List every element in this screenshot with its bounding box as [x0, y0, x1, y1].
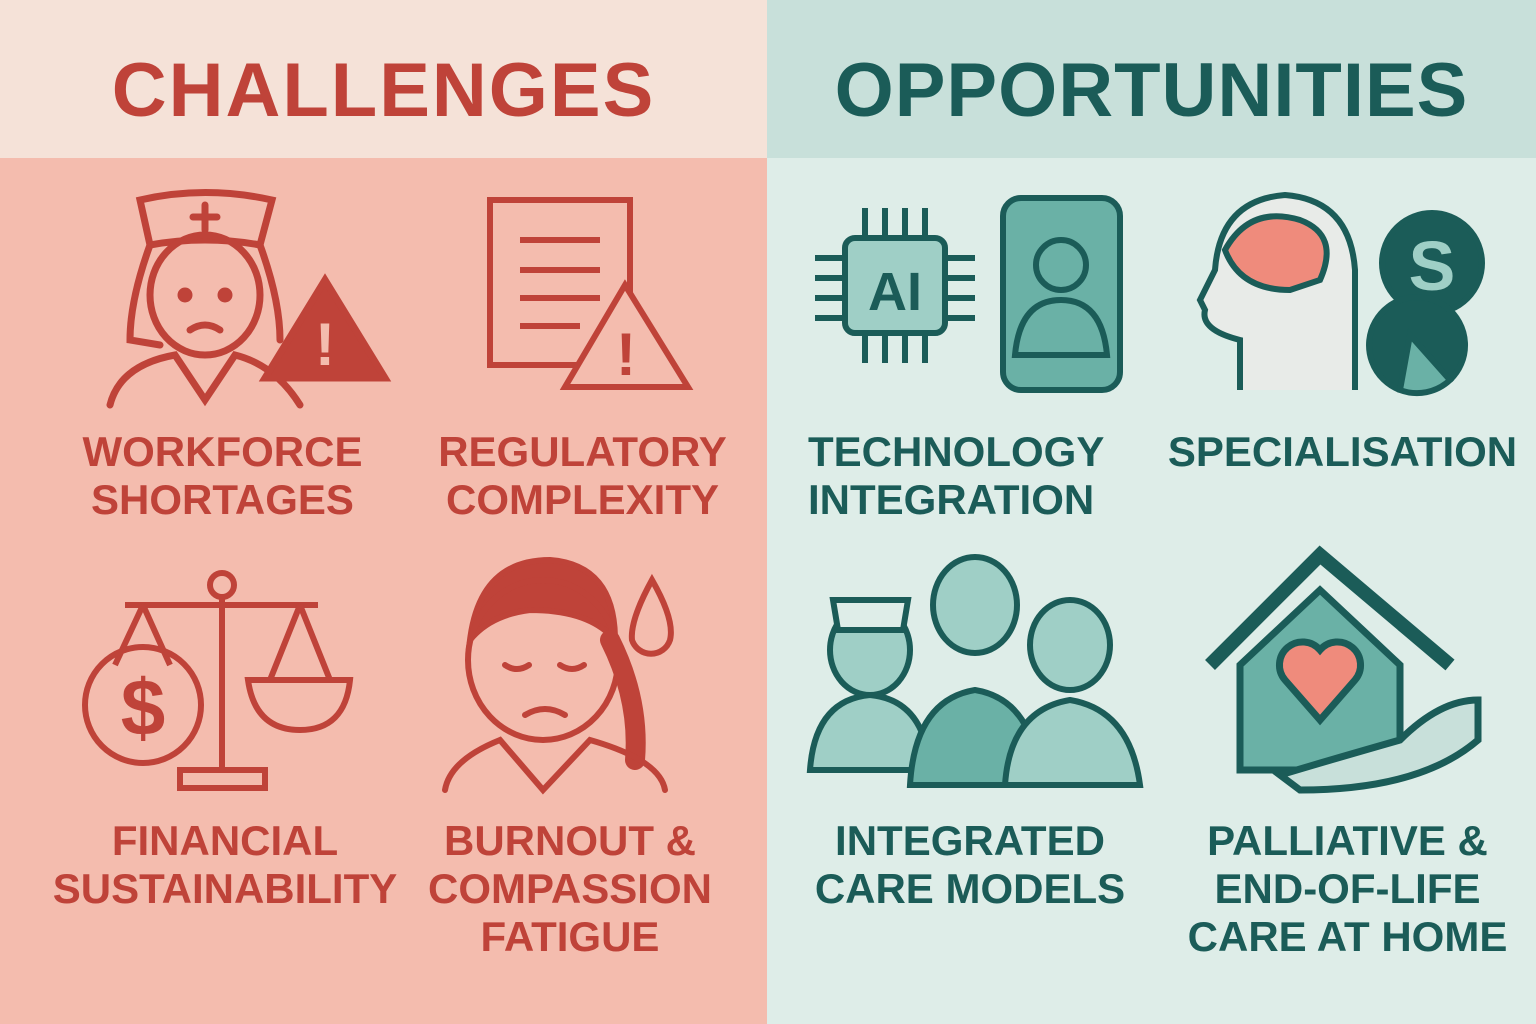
label: palliative care: CARE AT HOME — [1188, 913, 1507, 960]
icon: house with heart and hand — [1210, 555, 1478, 790]
icon: burnout person — [445, 560, 671, 790]
label: burnout: FATIGUE — [481, 913, 659, 960]
label: palliative care: END-OF-LIFE — [1215, 865, 1480, 912]
label: financial sustainability: FINANCIAL — [112, 817, 338, 864]
icons svg: $ — [121, 663, 165, 752]
label: workforce shortages: SHORTAGES — [91, 476, 354, 523]
label: burnout: BURNOUT & — [444, 817, 696, 864]
icon: nurse warning — [110, 192, 385, 405]
icon: brain head — [1200, 195, 1482, 393]
icon: care team — [810, 557, 1140, 785]
label: technology integration: INTEGRATION — [808, 476, 1094, 523]
icon: AI chip and phone — [815, 198, 1120, 390]
panel: challenges header — [0, 0, 767, 158]
label: regulatory complexity — [438, 428, 727, 523]
label: burnout: COMPASSION — [428, 865, 712, 912]
label: integrated care models: CARE MODELS — [815, 865, 1125, 912]
icons svg: ! — [616, 321, 636, 388]
label: technology integration — [808, 428, 1104, 523]
icon: document warning — [490, 200, 688, 387]
label: integrated care models: INTEGRATED — [835, 817, 1105, 864]
label: burnout — [428, 817, 712, 960]
label: workforce shortages: WORKFORCE — [82, 428, 362, 475]
label: financial sustainability — [53, 817, 397, 912]
panel: opportunities header — [767, 0, 1536, 158]
panel: challenges body — [0, 158, 767, 1024]
label: specialisation: SPECIALISATION — [1168, 428, 1517, 475]
label: technology integration: TECHNOLOGY — [808, 428, 1104, 475]
label: workforce shortages — [82, 428, 362, 523]
icon: scale and dollar — [85, 573, 350, 788]
icons svg: S — [1409, 227, 1455, 305]
title: challenges: CHALLENGES — [112, 48, 655, 133]
title: opportunities: OPPORTUNITIES — [835, 48, 1468, 133]
panel: opportunities body — [767, 158, 1536, 1024]
label: integrated care models — [815, 817, 1125, 912]
label: regulatory complexity: REGULATORY — [438, 428, 727, 475]
label: palliative care — [1188, 817, 1507, 960]
label: palliative care: PALLIATIVE & — [1207, 817, 1488, 864]
label: regulatory complexity: COMPLEXITY — [446, 476, 719, 523]
label: financial sustainability: SUSTAINABILITY — [53, 865, 397, 912]
icons svg: AI — [868, 262, 922, 322]
icons svg: ! — [315, 311, 335, 378]
